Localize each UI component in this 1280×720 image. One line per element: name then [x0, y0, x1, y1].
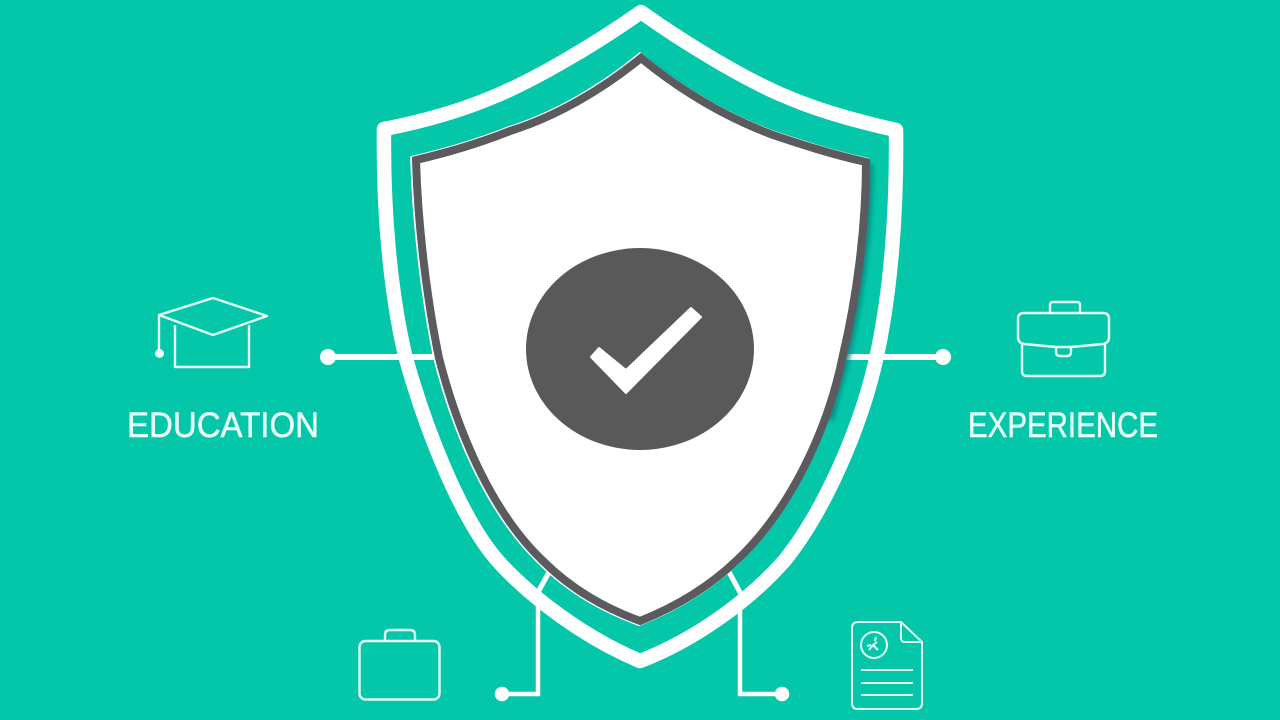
shield shadow [648, 60, 873, 422]
connector: bottom right line to document [729, 572, 787, 699]
label: experience: EXPERIENCE [968, 406, 1158, 445]
label: education: EDUCATION [127, 406, 319, 445]
connector: right line to experience [846, 349, 951, 365]
icon: graduation cap [155, 298, 267, 367]
shield grey border and white face [416, 58, 866, 621]
shield outer outline [384, 12, 896, 661]
icon: suitcase [360, 630, 440, 700]
icon: document [852, 622, 922, 709]
shield light edge [415, 58, 865, 621]
connector: bottom left line to suitcase [497, 572, 549, 699]
connector: left line to education [320, 349, 436, 365]
badge: dark ellipse with check mark [526, 248, 754, 450]
shield inner body [415, 58, 873, 621]
icon: briefcase [1018, 302, 1109, 376]
